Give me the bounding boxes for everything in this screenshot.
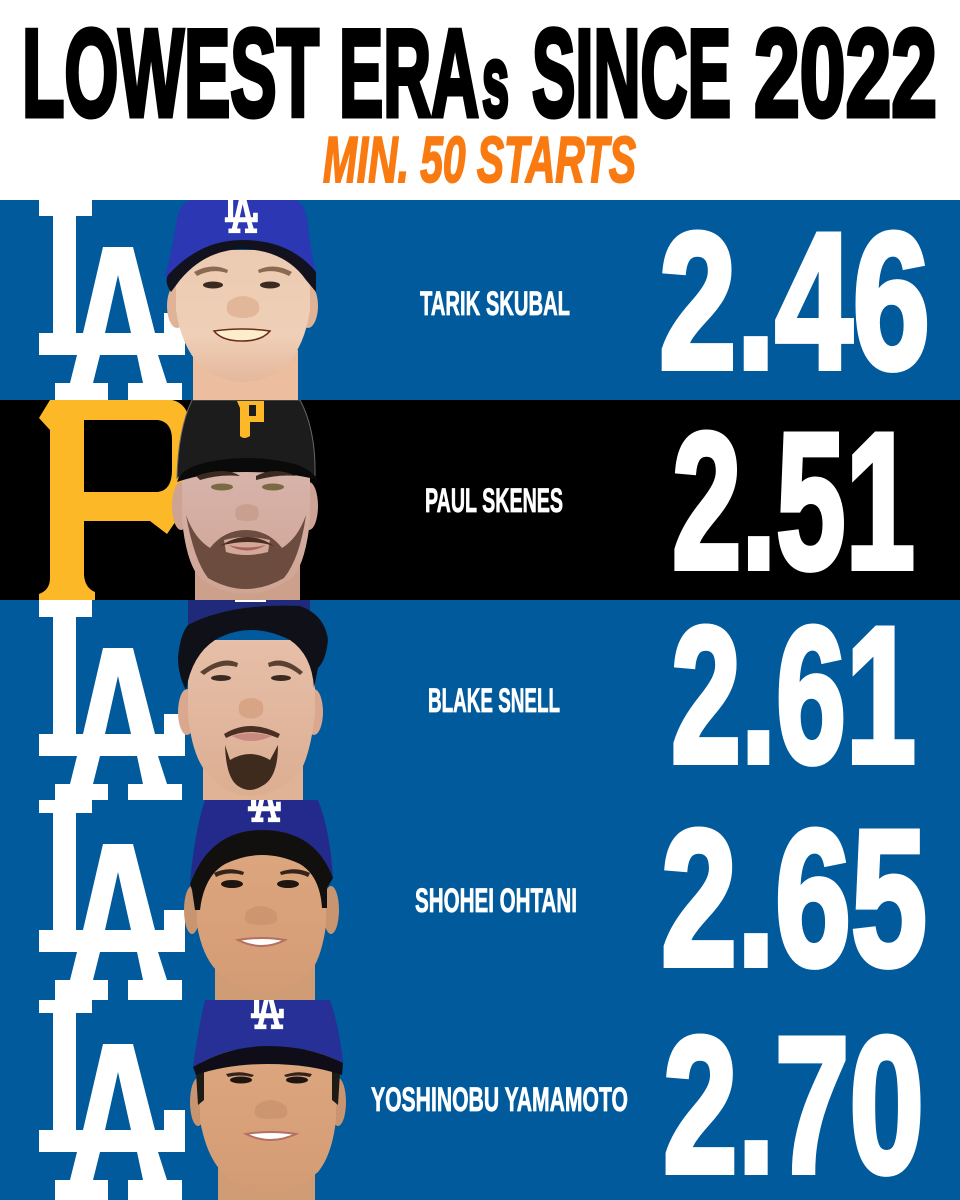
- name: Shohei Ohtani: SHOHEI OHTANI: [415, 882, 577, 920]
- title: s: [482, 24, 509, 138]
- name: Paul Skenes: PAUL SKENES: [425, 482, 563, 520]
- portrait: Shohei Ohtani: [184, 800, 339, 1000]
- row background: Skubal: [0, 200, 960, 400]
- logo: LA row 5: [39, 997, 185, 1200]
- logo: LA row 1: [39, 200, 185, 403]
- logo: Pirates P: [39, 400, 192, 600]
- title: [22, 5, 937, 143]
- title: ERA: [339, 5, 479, 143]
- subtitle: MIN. 50 STARTS: [323, 123, 636, 196]
- logo: LA row 3: [39, 600, 185, 804]
- name: Yoshinobu Yamamoto: YOSHINOBU YAMAMOTO: [371, 1081, 628, 1119]
- row background: Skenes: [0, 400, 960, 600]
- portrait: Tarik Skubal: [165, 187, 318, 400]
- portrait: Blake Snell: [178, 600, 328, 800]
- name: Tarik Skubal: TARIK SKUBAL: [420, 285, 570, 323]
- logo: LA row 4: [39, 797, 185, 1000]
- name: Blake Snell: BLAKE SNELL: [428, 682, 560, 720]
- portrait: Paul Skenes: [172, 400, 318, 600]
- row background: Yamamoto: [0, 1000, 960, 1200]
- title: LOWEST: [22, 5, 319, 143]
- portrait: Yoshinobu Yamamoto: [190, 983, 346, 1200]
- row background: Ohtani: [0, 800, 960, 1000]
- row background: Snell: [0, 600, 960, 800]
- title: SINCE: [532, 5, 731, 143]
